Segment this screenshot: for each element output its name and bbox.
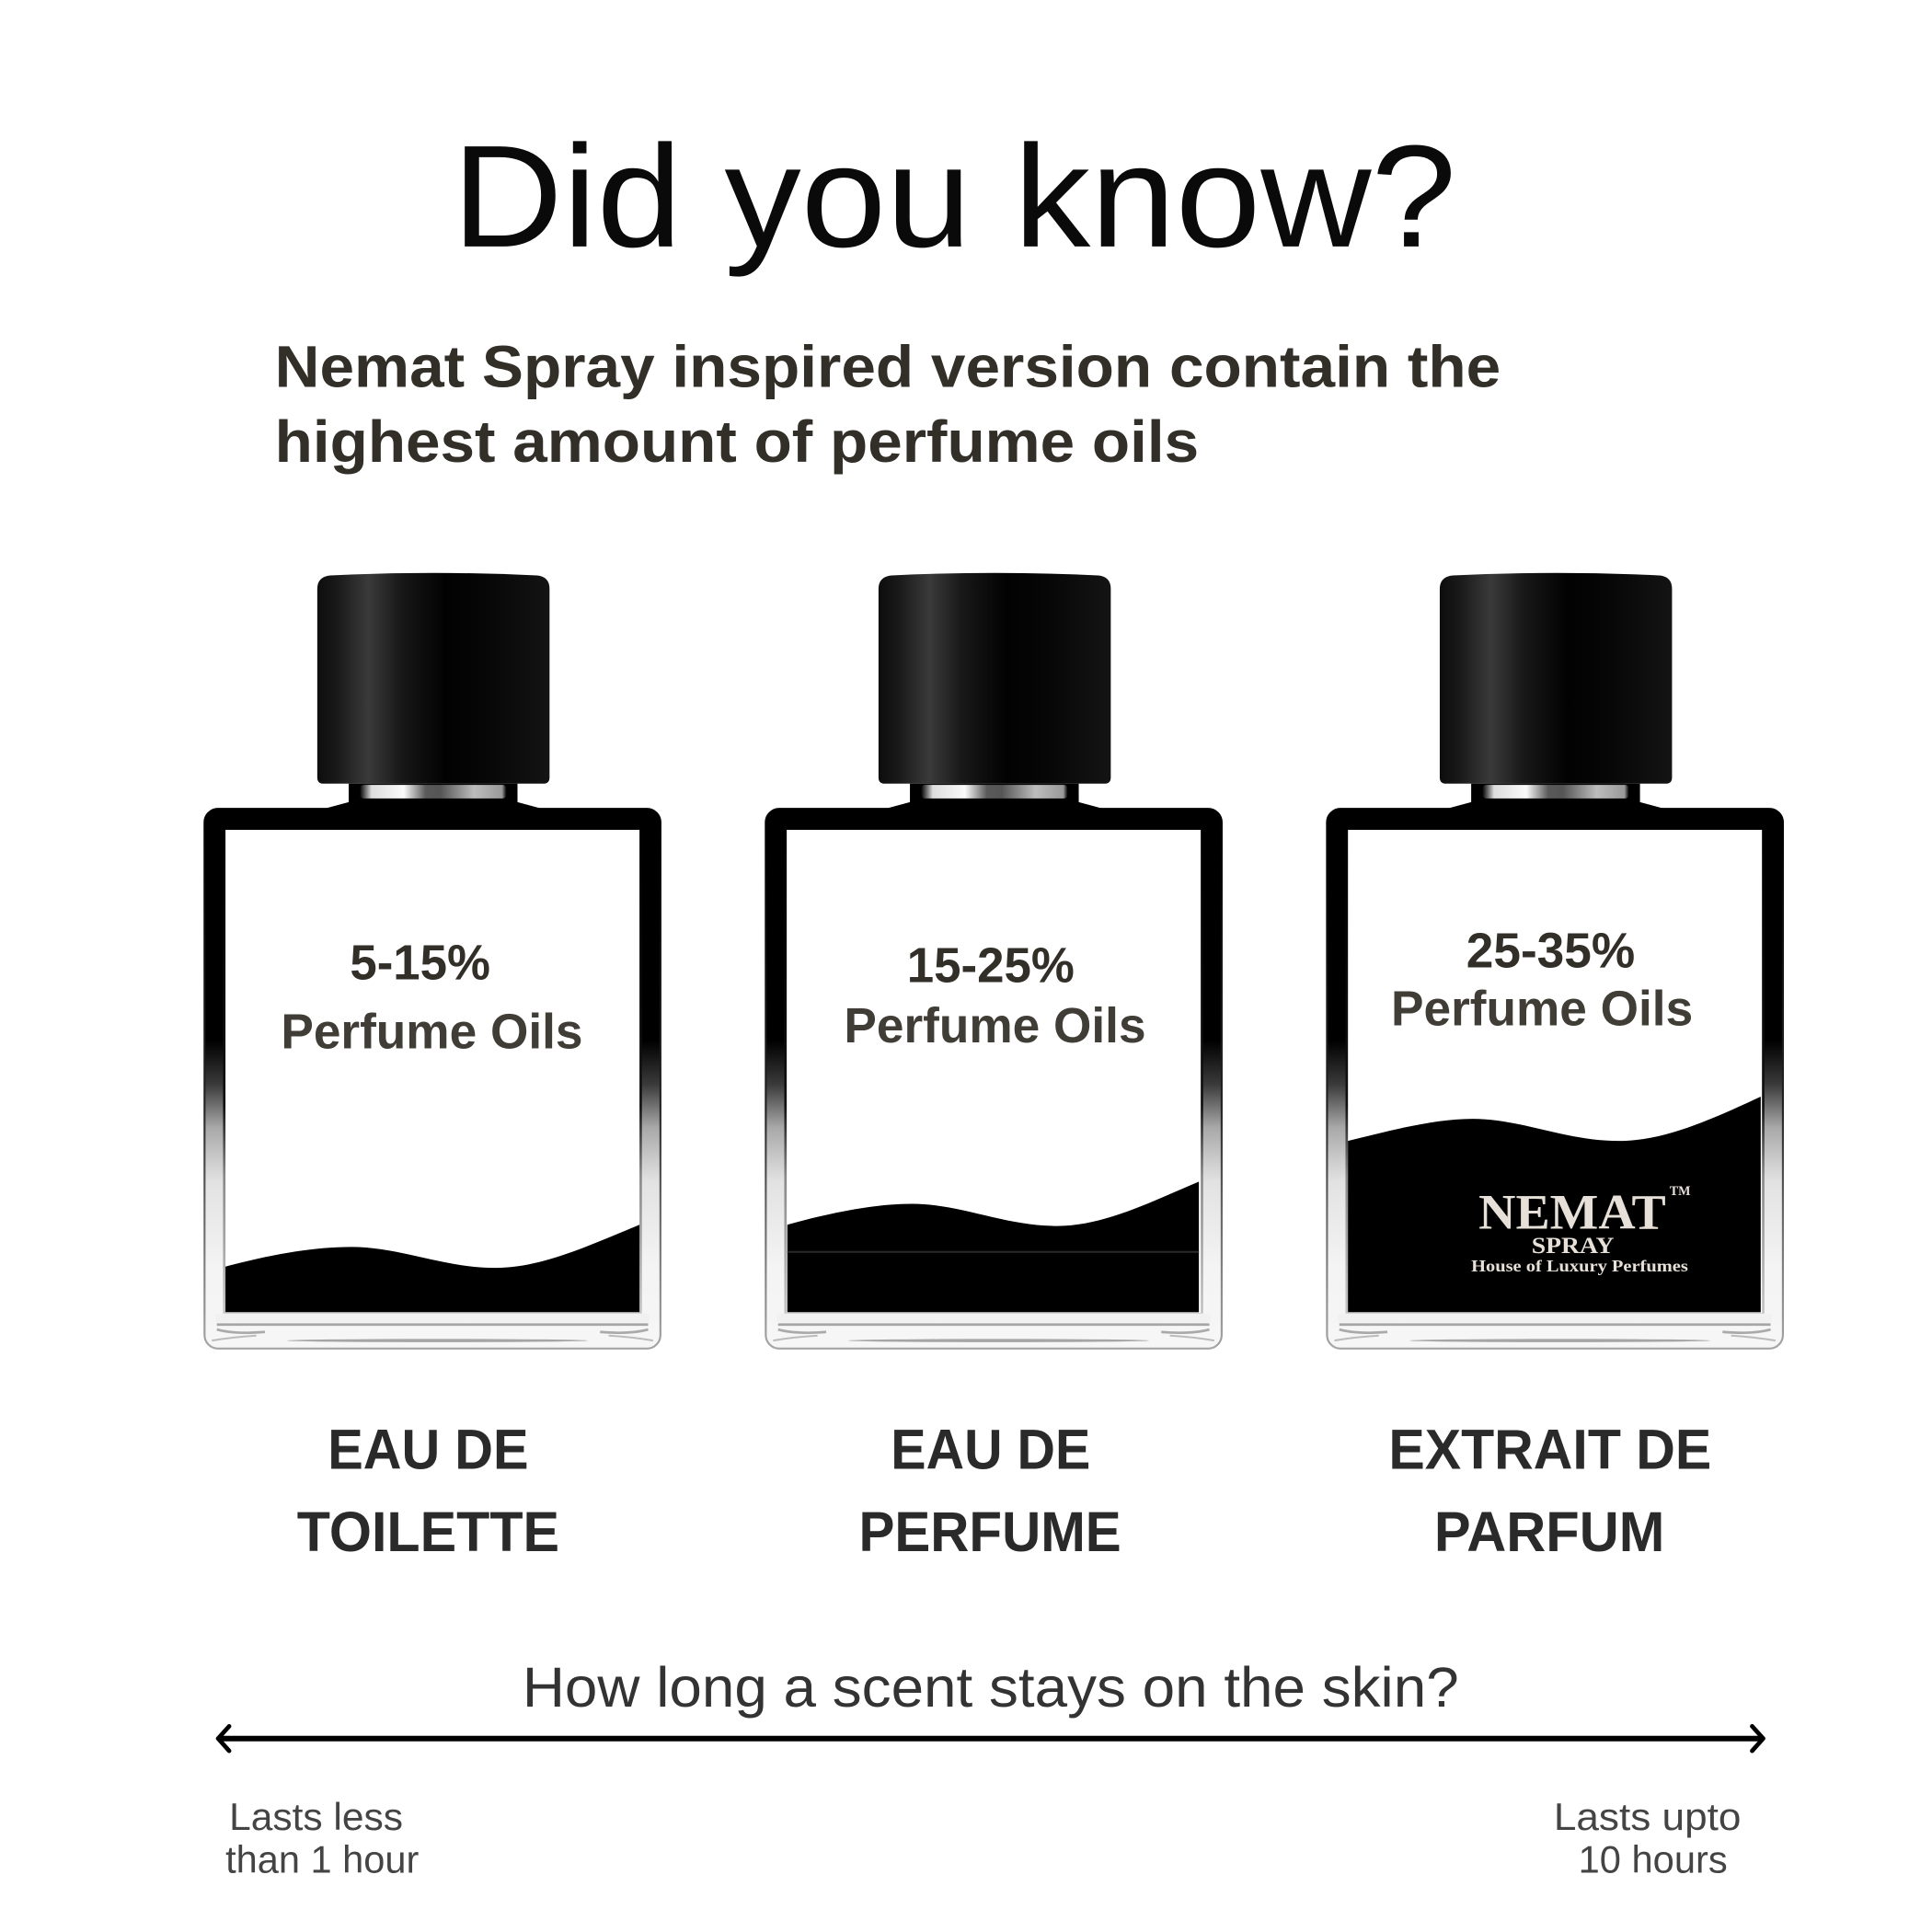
perfume oil level bbox=[788, 1181, 1199, 1312]
perfume oils label: Perfume Oils bbox=[1391, 982, 1693, 1036]
longevity question: How long a scent stays on the skin? bbox=[523, 1656, 1459, 1719]
title: Did you know? bbox=[453, 116, 1456, 278]
brand logo bbox=[1471, 1184, 1691, 1275]
label: longest duration bbox=[1554, 1795, 1741, 1881]
bottle cap bbox=[879, 573, 1110, 784]
brand logo: NEMAT bbox=[1478, 1184, 1666, 1239]
bottle cap bbox=[317, 573, 549, 784]
label: longest duration: 10 hours bbox=[1579, 1838, 1728, 1881]
subtitle bbox=[275, 334, 1501, 475]
perfume oils label: Perfume Oils bbox=[281, 1006, 582, 1060]
perfume oils label: Perfume Oils bbox=[844, 999, 1146, 1053]
subtitle: Nemat Spray inspired version contain the bbox=[275, 334, 1501, 400]
arrow: longevity scale bbox=[218, 1726, 1764, 1751]
perfume oil level bbox=[1348, 1097, 1761, 1312]
bottle glass bbox=[204, 809, 661, 1349]
label: longest duration: Lasts upto bbox=[1554, 1795, 1741, 1838]
percentage label: 5-15% bbox=[350, 937, 490, 991]
perfume type names: EXTRAIT DE bbox=[1388, 1418, 1711, 1481]
label: shortest duration bbox=[225, 1795, 420, 1881]
brand logo: TM bbox=[1670, 1184, 1691, 1199]
subtitle: highest amount of perfume oils bbox=[275, 408, 1199, 475]
label: shortest duration: Lasts less bbox=[229, 1795, 403, 1838]
perfume type names: EAU DE bbox=[328, 1418, 529, 1481]
percentage label: 25-35% bbox=[1466, 924, 1635, 978]
bottle cap bbox=[1440, 573, 1672, 784]
percentage label: 15-25% bbox=[907, 938, 1075, 993]
panel: eau de perfume bottle bbox=[765, 573, 1222, 1349]
bottle glass bbox=[765, 809, 1222, 1349]
bottle neck ring bbox=[316, 784, 549, 811]
label: shortest duration: than 1 hour bbox=[225, 1838, 420, 1881]
perfume oil level bbox=[225, 1225, 639, 1312]
perfume type names: PARFUM bbox=[1434, 1501, 1664, 1564]
bottle neck ring bbox=[878, 784, 1110, 811]
perfume type names: EAU DE bbox=[891, 1418, 1090, 1481]
perfume type names bbox=[297, 1418, 1711, 1564]
panel: eau de toilette bottle bbox=[204, 573, 661, 1349]
brand logo: House of Luxury Perfumes bbox=[1471, 1257, 1688, 1275]
panel: extrait de parfum bottle bbox=[1327, 573, 1783, 1349]
perfume type names: TOILETTE bbox=[297, 1501, 559, 1564]
perfume type names: PERFUME bbox=[858, 1501, 1121, 1564]
bottle neck ring bbox=[1439, 784, 1672, 811]
bottle glass bbox=[1327, 809, 1783, 1349]
brand logo: SPRAY bbox=[1532, 1232, 1614, 1259]
